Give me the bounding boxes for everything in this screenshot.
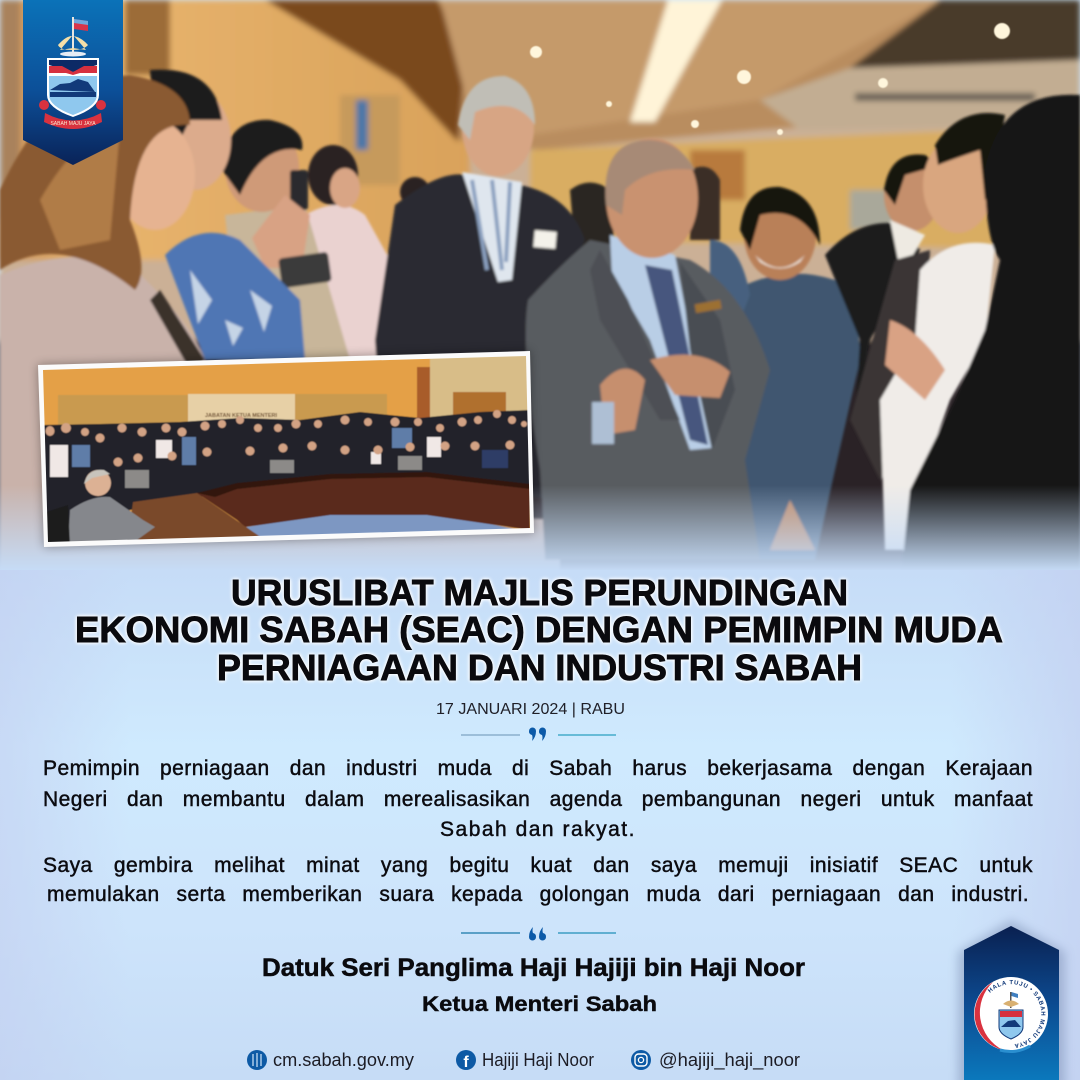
- woman in blazer: [0, 257, 560, 580]
- paragraph two: [43, 854, 1033, 906]
- woman in black at right: [900, 95, 1080, 580]
- people in photo: [0, 70, 1080, 580]
- man in denim shirt: [735, 274, 860, 560]
- instagram contact: @hajiji_haji_noor: [659, 1050, 800, 1071]
- paragraph one: Pemimpin perniagaan dan industri muda di Sabah harus bekerjasama dengan Kerajaan: [43, 757, 1033, 780]
- closing quote divider: [461, 927, 616, 940]
- inset group photo: JABATAN KETUA MENTERI: [205, 413, 277, 419]
- conference table: [197, 474, 530, 530]
- seated man in grey: [68, 497, 155, 545]
- man in beige with phone: [225, 205, 350, 360]
- old man dark suit: [375, 174, 585, 500]
- crest: motto ribbon: [39, 100, 106, 129]
- paragraph one: [43, 757, 1033, 841]
- title: URUSLIBAT MAJLIS PERUNDINGAN: [231, 572, 848, 613]
- man in white shirt: [880, 243, 995, 550]
- round badge: HALA TUJU • SABAH MAJU JAYA: [988, 980, 1046, 1048]
- facebook contact: Hajiji Haji Noor: [482, 1050, 594, 1070]
- inset group photo: [38, 350, 535, 550]
- ceiling lights: [530, 23, 1010, 135]
- main man grey suit: [526, 240, 770, 560]
- facebook contact: f: [463, 1054, 469, 1071]
- event photo: [0, 0, 1080, 580]
- light panel: [0, 485, 1080, 571]
- opening quote divider: [461, 728, 616, 741]
- speaker name: Datuk Seri Panglima Haji Hajiji bin Haji Noor: [262, 954, 805, 982]
- crest: flag and hands: [58, 17, 88, 56]
- title: PERNIAGAAN DAN INDUSTRI SABAH: [217, 647, 862, 688]
- carpet: [246, 514, 516, 536]
- paragraph one: Sabah dan rakyat.: [440, 818, 636, 841]
- bottom right banner with badge: [954, 918, 1069, 1080]
- paragraph one: Negeri dan membantu dalam merealisasikan agenda pembangunan negeri untuk manfaat: [43, 788, 1033, 811]
- paragraph two: Saya gembira melihat minat yang begitu kuat dan saya memuji inisiatif SEAC untuk: [43, 854, 1033, 877]
- man in batik shirt: [165, 233, 305, 360]
- website contact: cm.sabah.gov.my: [273, 1050, 414, 1070]
- room walls: [43, 358, 530, 528]
- woman in white: [305, 205, 390, 360]
- crest: motto ribbon: SABAH MAJU JAYA: [50, 121, 96, 127]
- speaker title: Ketua Menteri Sabah: [422, 993, 657, 1016]
- paragraph two: memulakan serta memberikan suara kepada golongan muda dari perniagaan dan industri.: [47, 883, 1029, 906]
- crowd: [44, 410, 529, 526]
- date: 17 JANUARI 2024 | RABU: [436, 701, 625, 718]
- man in black suit: [825, 223, 920, 420]
- title: EKONOMI SABAH (SEAC) DENGAN PEMIMPIN MUDA: [75, 609, 1003, 650]
- top left banner with crest: [23, 0, 123, 165]
- title: [75, 572, 1003, 688]
- crest: shield: [47, 58, 99, 117]
